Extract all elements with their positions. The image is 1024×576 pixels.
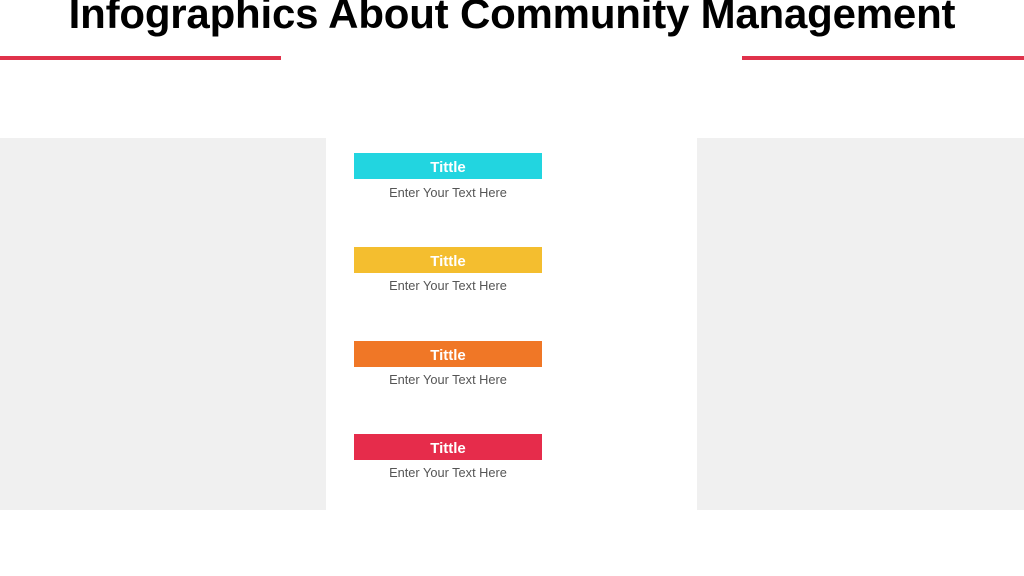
text 1: Enter Your Text Here: [389, 185, 507, 200]
title bar orange: Tittle: [430, 347, 466, 364]
red line right: [742, 56, 1024, 60]
item 2: [354, 247, 542, 293]
title bar red: [354, 434, 542, 460]
title bar yellow: [354, 247, 542, 273]
item 4: [354, 434, 542, 480]
panel: left gray: [0, 138, 326, 510]
title bar yellow: Tittle: [430, 253, 466, 270]
item 1: [354, 153, 542, 200]
text 3: Enter Your Text Here: [389, 372, 507, 387]
panel: right gray: [697, 138, 1024, 510]
title bar orange: [354, 341, 542, 367]
red line left: [0, 56, 281, 60]
item 3: [354, 341, 542, 387]
text 4: Enter Your Text Here: [389, 465, 507, 480]
title bar cyan: Tittle: [430, 159, 466, 176]
title bar cyan: [354, 153, 542, 179]
title bar red: Tittle: [430, 440, 466, 457]
text 2: Enter Your Text Here: [389, 278, 507, 293]
